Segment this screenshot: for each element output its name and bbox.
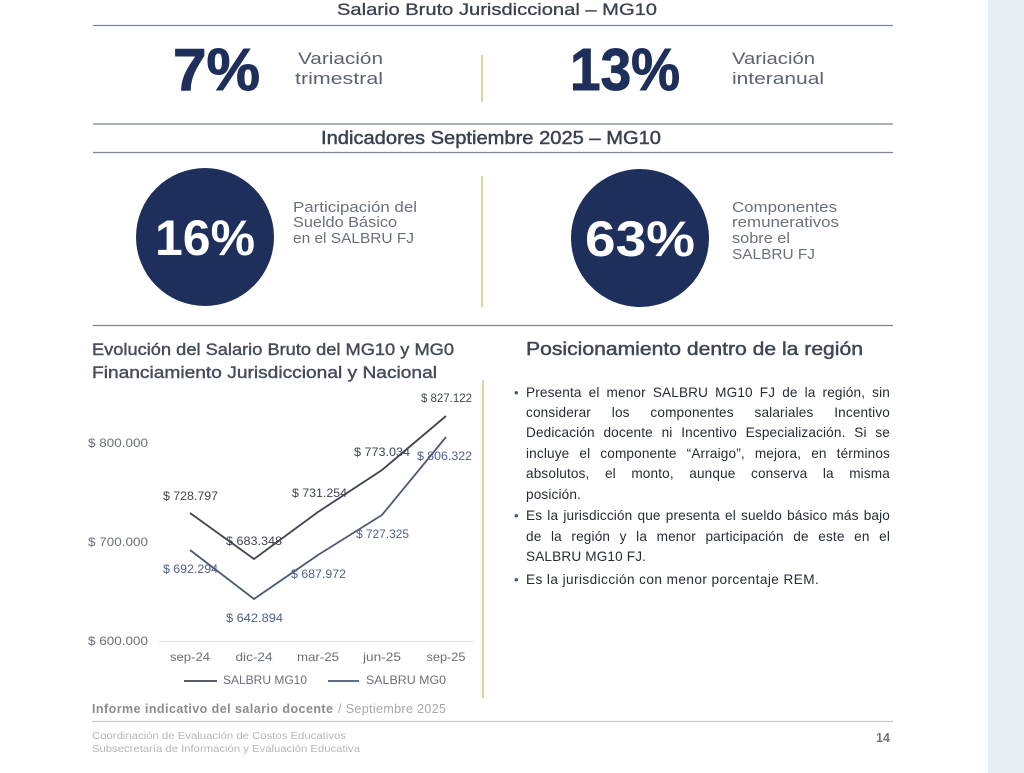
- data labels MG10: $ 827.122: [421, 391, 472, 405]
- x axis labels: jun-25: [362, 650, 401, 664]
- footer: report title: [92, 702, 446, 716]
- stat: 7% variación trimestral: [173, 37, 383, 103]
- heading: chart title: Financiamiento Jurisdiccional y Nacional: [92, 364, 437, 382]
- line chart: [88, 391, 473, 687]
- data labels MG0: $ 727.325: [356, 527, 409, 541]
- y axis labels: $ 600.000: [88, 634, 148, 648]
- title: Salario Bruto Jurisdiccional: Salario Bruto Jurisdiccional – MG10: [337, 0, 657, 19]
- data labels MG0: $ 806.322: [417, 449, 472, 463]
- x axis labels: sep-24: [170, 650, 210, 664]
- x axis labels: mar-25: [297, 650, 339, 664]
- text: Participación del Sueldo Básico: en el SALBRU FJ: [293, 231, 414, 247]
- series: SALBRU MG0: [190, 437, 446, 599]
- text block: regional positioning bullets: •: [514, 385, 519, 400]
- text: Participación del Sueldo Básico: Participación del: [293, 200, 417, 216]
- heading: chart title: [92, 341, 454, 382]
- text block: regional positioning bullets: absolutos, el monto, aunque conserva la misma: [526, 466, 890, 481]
- stat: 13% variación interanual: 13%: [570, 37, 680, 103]
- legend: [184, 675, 446, 687]
- data labels MG0: $ 642.894: [226, 611, 283, 625]
- indicator: 16%: [136, 168, 274, 306]
- data labels MG10: $ 773.034: [354, 445, 410, 459]
- text: Componentes remunerativos: SALBRU FJ: [732, 247, 815, 263]
- text block: regional positioning bullets: considerar los componentes salariales Incentivo: [526, 405, 890, 420]
- footer: credits: Coordinación de Evaluación de Costos Educativos: [92, 730, 346, 742]
- stat: 13% variación interanual: Variación: [732, 49, 815, 68]
- footer: credits: [92, 730, 360, 755]
- heading: Indicadores Septiembre 2025: Indicadores Septiembre 2025 – MG10: [321, 128, 661, 148]
- text: Participación del Sueldo Básico: [293, 200, 417, 247]
- stat: 13% variación interanual: [570, 37, 824, 103]
- footer: report title: Informe indicativo del salario docente: [92, 702, 333, 716]
- page number: 14: [876, 731, 890, 745]
- footer: credits: Subsecretaría de Información y Evaluación Educativa: [92, 743, 360, 755]
- text: Componentes remunerativos: remunerativos: [732, 215, 839, 231]
- stat: 7% variación trimestral: Variación: [298, 49, 383, 68]
- data labels MG10: [163, 391, 472, 548]
- x axis labels: dic-24: [236, 650, 273, 664]
- legend: SALBRU MG0: [366, 675, 446, 687]
- data labels MG10: $ 728.797: [163, 489, 218, 503]
- text block: regional positioning bullets: Dedicación docente ni Incentivo Especialización. Si se: [526, 425, 890, 440]
- data labels MG10: $ 683.348: [226, 534, 282, 548]
- indicator: 63%: 63%: [585, 211, 695, 267]
- data labels MG0: $ 692.294: [163, 562, 218, 576]
- heading: chart title: Evolución del Salario Bruto del MG10 y MG0: [92, 341, 454, 359]
- text: Participación del Sueldo Básico: Sueldo Básico: [293, 215, 397, 231]
- indicator: 16%: 16%: [155, 210, 255, 266]
- text block: regional positioning bullets: Es la jurisdicción que presenta el sueldo básico más bajo: [526, 508, 890, 523]
- data labels MG0: $ 687.972: [291, 567, 346, 581]
- text block: regional positioning bullets: •: [514, 508, 519, 523]
- text: Componentes remunerativos: sobre el: [732, 231, 790, 247]
- text: Componentes remunerativos: Componentes: [732, 200, 837, 216]
- legend: SALBRU MG10: [223, 675, 307, 687]
- stat: 13% variación interanual: interanual: [732, 69, 824, 88]
- data labels MG10: $ 731.254: [292, 486, 347, 500]
- y axis labels: [88, 436, 148, 648]
- footer: report title: / Septiembre 2025: [338, 702, 446, 716]
- text block: regional positioning bullets: incluye el componente “Arraigo”, mejora, en términos: [526, 446, 890, 461]
- series: SALBRU MG10: [190, 416, 446, 559]
- text block: regional positioning bullets: •: [514, 572, 519, 587]
- text block: regional positioning bullets: de la región y la menor participación de este en el: [526, 529, 890, 544]
- data labels MG0: [163, 449, 472, 625]
- text block: regional positioning bullets: posición.: [526, 487, 581, 502]
- stat: 7% variación trimestral: 7%: [173, 37, 260, 103]
- text block: regional positioning bullets: [514, 385, 890, 587]
- stat: 7% variación trimestral: trimestral: [295, 69, 383, 88]
- x axis labels: sep-25: [426, 650, 466, 664]
- text: Componentes remunerativos: [732, 200, 839, 263]
- text block: regional positioning bullets: Es la jurisdicción con menor porcentaje REM.: [526, 572, 819, 587]
- x axis labels: [170, 650, 466, 664]
- text block: regional positioning bullets: SALBRU MG10 FJ.: [526, 549, 646, 564]
- text block: regional positioning bullets: Presenta el menor SALBRU MG10 FJ de la región, sin: [526, 385, 890, 400]
- y axis labels: $ 800.000: [88, 436, 148, 450]
- y axis labels: $ 700.000: [88, 535, 148, 549]
- indicator: 63%: [571, 169, 709, 307]
- heading: Posicionamiento: Posicionamiento dentro de la región: [526, 339, 863, 359]
